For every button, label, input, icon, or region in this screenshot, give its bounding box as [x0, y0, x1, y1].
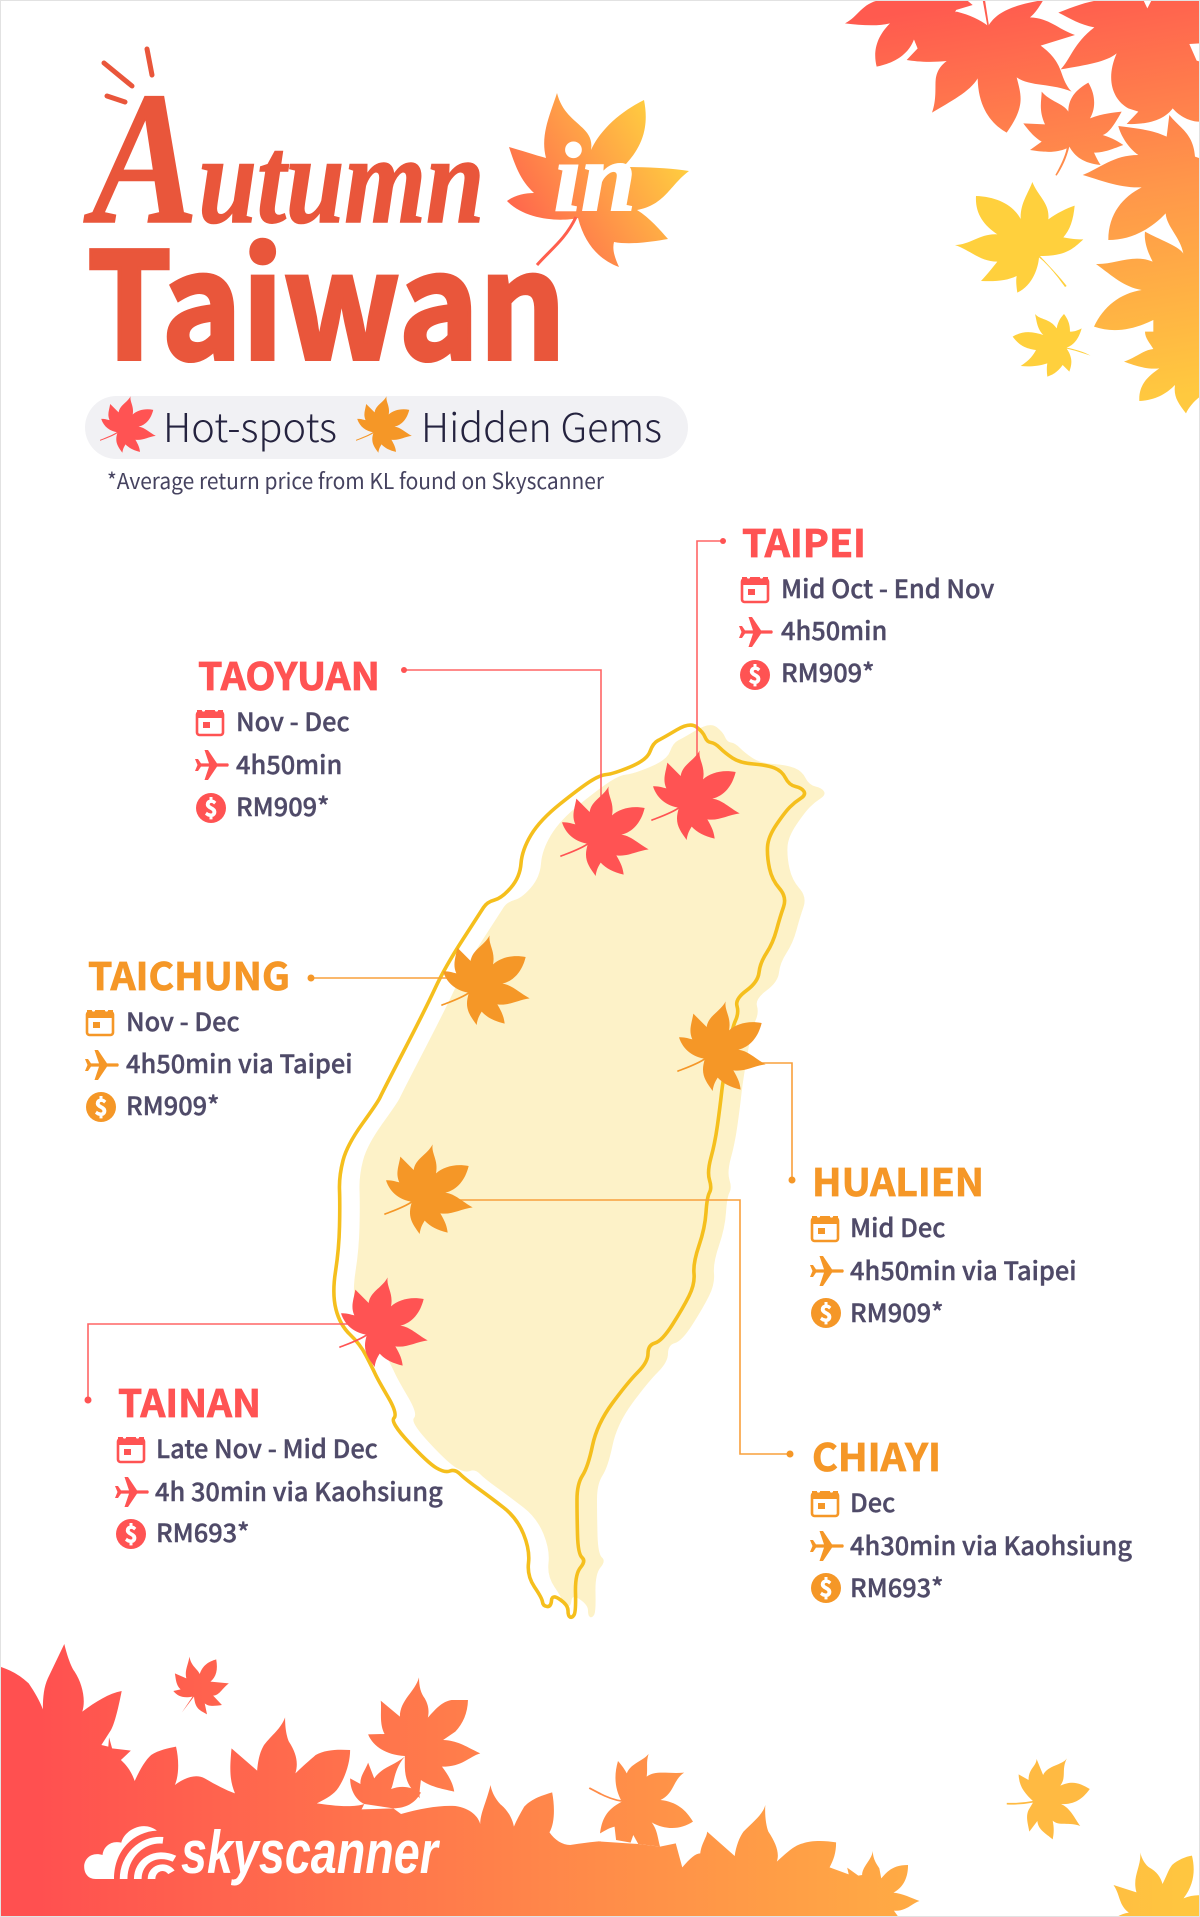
legend label: Hot-spots: Hot-spots	[163, 396, 337, 454]
icon: price: $	[820, 1296, 832, 1328]
logo wordmark: skyscanner	[181, 1819, 441, 1886]
price: RM909*	[781, 654, 874, 690]
flight time: 4h30min via Kaohsiung	[850, 1527, 1132, 1563]
price: RM909*	[850, 1294, 943, 1330]
skyscanner logo	[84, 1819, 441, 1886]
icon: price: $	[820, 1571, 832, 1603]
icon: plane	[810, 1531, 844, 1561]
legend label: Hidden Gems: Hidden Gems	[421, 396, 662, 454]
footnote: *Average return price from KL found on Skyscanner	[107, 464, 604, 496]
icon: price	[811, 1296, 841, 1328]
icon: calendar	[197, 708, 223, 735]
icon: price	[86, 1090, 116, 1122]
panel: Taichung	[85, 946, 353, 1123]
connector: Taipei	[697, 538, 726, 760]
Taiwan map	[84, 538, 825, 1617]
heading word: Taiwan: Taiwan	[87, 189, 566, 402]
heading word: Autumn: Autumn	[83, 53, 484, 263]
city name: TAIPEI	[742, 513, 866, 568]
icon: calendar	[812, 1489, 838, 1516]
flight time: 4h 30min via Kaohsiung	[155, 1473, 443, 1509]
map fill	[354, 725, 825, 1617]
city name: TAOYUAN	[198, 646, 380, 701]
legend leaf: hidden gem	[356, 396, 412, 453]
logo mark: cloud	[84, 1826, 174, 1879]
season text: Mid Oct - End Nov	[781, 570, 995, 606]
leaf border: bottom left	[0, 1644, 601, 1917]
word: in: in	[554, 124, 636, 232]
title: Autumn in Taiwan	[83, 49, 689, 402]
panel: Chiayi	[810, 1427, 1132, 1605]
floating leaf: lower right	[1007, 1758, 1090, 1839]
connector: Chiayi	[450, 1200, 794, 1458]
icon: plane	[739, 617, 773, 647]
flight time: 4h50min via Taipei	[850, 1252, 1077, 1288]
season text: Nov - Dec	[236, 703, 350, 739]
icon: price: $	[749, 658, 761, 690]
icon: price	[196, 791, 226, 823]
icon: calendar	[118, 1435, 144, 1462]
city name: TAINAN	[118, 1373, 261, 1428]
flight time: 4h50min	[236, 746, 342, 782]
price: RM909*	[236, 788, 329, 824]
city name: HUALIEN	[812, 1152, 984, 1207]
city name: CHIAYI	[812, 1427, 941, 1482]
map leaf: Hualien	[677, 1001, 766, 1091]
map leaf: Taipei	[651, 750, 740, 840]
sparkle strokes beside the title	[104, 49, 152, 102]
map leaf: Chiayi	[384, 1144, 473, 1234]
leaf border: bottom right	[598, 1754, 1200, 1917]
legend leaf: hot-spot	[100, 396, 156, 453]
map leaf: Tainan	[339, 1277, 428, 1367]
season text: Late Nov - Mid Dec	[156, 1430, 378, 1466]
legend pill: Hot-spots and Hidden Gems	[85, 396, 688, 459]
connector: Tainan	[84, 1324, 360, 1404]
season text: Nov - Dec	[126, 1003, 240, 1039]
flight time: 4h50min	[781, 612, 887, 648]
connector: Taoyuan	[401, 667, 601, 800]
price: RM909*	[126, 1087, 219, 1123]
season text: Dec	[850, 1484, 895, 1520]
icon: price: $	[125, 1517, 137, 1549]
icon: plane	[115, 1477, 149, 1507]
icon: plane	[195, 750, 229, 780]
price: RM693*	[850, 1569, 943, 1605]
connector: Taichung	[308, 974, 450, 982]
icon: plane	[810, 1256, 844, 1286]
season text: Mid Dec	[850, 1209, 945, 1245]
gradient leaf holding the word in	[507, 93, 689, 267]
map outline	[334, 725, 805, 1617]
map leaf: Taichung	[441, 935, 530, 1025]
icon: calendar	[87, 1008, 113, 1035]
icon: price	[811, 1571, 841, 1603]
icon: calendar	[812, 1214, 838, 1241]
icon: price	[740, 658, 770, 690]
map leaf: Taoyuan	[560, 786, 649, 876]
price: RM693*	[156, 1514, 249, 1550]
icon: calendar	[742, 575, 768, 602]
panel: Hualien	[810, 1152, 1077, 1330]
connector: Hualien	[755, 1063, 796, 1184]
flight time: 4h50min via Taipei	[126, 1045, 353, 1081]
icon: plane	[85, 1050, 119, 1080]
icon: price: $	[95, 1090, 107, 1122]
panel: Tainan	[115, 1373, 443, 1550]
panel: Taipei	[739, 513, 995, 690]
leaf cluster: top right corner	[845, 0, 1200, 413]
city name: TAICHUNG	[88, 946, 290, 1001]
panel: Taoyuan	[195, 646, 380, 824]
icon: price: $	[205, 791, 217, 823]
icon: price	[116, 1517, 146, 1549]
